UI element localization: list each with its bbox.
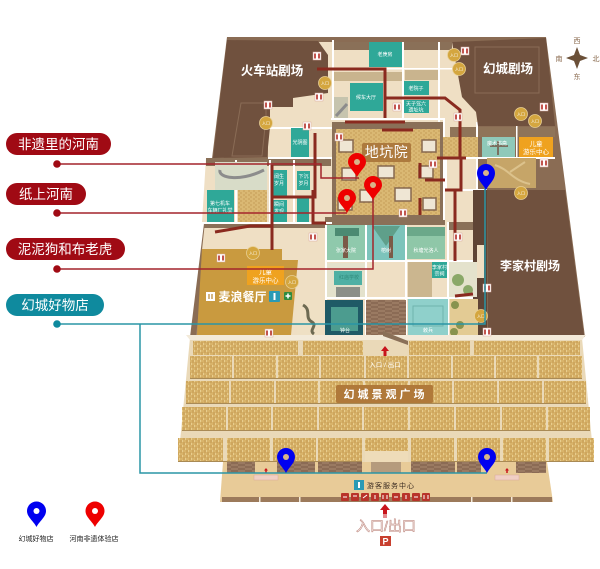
restaurant: 麦浪餐厅: 游乐中心 [252, 276, 279, 284]
callout: 纸上河南 [6, 183, 86, 217]
teal exhibition rooms: 发现 [274, 208, 284, 215]
callout: 泥泥狗和布老虎 [6, 238, 125, 273]
compass: 北 [592, 55, 600, 63]
callout: 幻城好物店: 幻城好物店 [21, 298, 89, 313]
entrance markers [246, 48, 542, 322]
garden and sand areas: 魔术书斋 [487, 140, 507, 147]
courtyard halls [325, 225, 448, 335]
theatre: 李家村剧场: 李家村剧场 [500, 258, 560, 273]
teal exhibition rooms: 天子驾六 [406, 100, 426, 108]
compass [556, 37, 600, 81]
service icons [341, 493, 430, 501]
teal exhibition rooms: 候车大厅 [356, 94, 376, 101]
compass: 东 [574, 72, 580, 81]
visitor service centre [220, 451, 553, 502]
teal exhibition rooms [207, 42, 447, 278]
theatre: 火车站剧场 [213, 40, 328, 158]
children's centre: 儿童游乐中心 [519, 137, 553, 157]
blue pin: south-west [277, 448, 295, 473]
legend: 幻城好物店 [18, 502, 54, 543]
theatre: 李家村剧场 [473, 190, 584, 335]
plaza: 幻城景观广场: 入口 / 出口 [369, 360, 401, 369]
teal exhibition rooms: 李家村 [432, 264, 447, 271]
callout: 非遗里的河南 [6, 133, 111, 168]
teal exhibition rooms: 老院子 [408, 85, 424, 92]
teal exhibition rooms: 光阴图 [292, 139, 308, 146]
teal exhibition rooms: 岁月 [274, 180, 284, 187]
callout: 纸上河南: 纸上河南 [19, 187, 73, 202]
teal exhibition rooms: 阔生 [274, 173, 284, 180]
entrance label: 入口/出口 [356, 518, 416, 534]
courtyard halls: 红庙学校 [339, 274, 359, 281]
legend: 幻城好物店: 幻城好物店 [18, 534, 54, 543]
theatre: 幻城剧场: 幻城剧场 [483, 61, 533, 76]
red pin 3 [338, 189, 356, 213]
visitor service centre: 游客服务中心 [367, 481, 415, 490]
children's centre: 儿童游乐中心: 儿童 [530, 139, 543, 148]
compass: 西 [574, 37, 580, 45]
leader lines [57, 164, 487, 473]
teal exhibition rooms: 下沉 [298, 173, 309, 180]
children's centre: 儿童游乐中心: 游乐中心 [523, 147, 550, 156]
label: 地坑院: 地坑院 [365, 144, 408, 160]
teal exhibition rooms: 岁月 [298, 180, 309, 187]
icon: parking [380, 536, 391, 546]
restaurant: 麦浪餐厅 [197, 249, 298, 335]
teal exhibition rooms: 遗址坑 [408, 106, 424, 114]
restrooms icons [217, 47, 548, 337]
entrance arrow [380, 504, 390, 517]
courtyard halls: 榕树 [381, 247, 391, 254]
theatre: 幻城剧场 [452, 38, 555, 126]
callout: 泥泥狗和布老虎: 泥泥狗和布老虎 [18, 242, 112, 257]
legend: 河南非遗体验店: 河南非遗体验店 [70, 534, 118, 543]
callout: 幻城好物店 [6, 294, 104, 328]
blue pin: north [477, 164, 495, 190]
courtyard halls: 敕兵 [423, 327, 433, 334]
courtyard: 地坑院 [332, 122, 443, 217]
teal exhibition rooms: 车辆厂礼堂 [207, 207, 233, 214]
courtyard halls: 张家大院 [336, 247, 356, 254]
teal exhibition rooms: 老庚房 [377, 51, 393, 58]
icon: parking: P [382, 536, 389, 546]
courtyard halls: 秋塘光洛人 [413, 247, 439, 254]
theatre: 火车站剧场: 火车站剧场 [241, 63, 303, 78]
courtyard halls: 钟台 [340, 327, 350, 334]
legend: 河南非遗体验店 [70, 502, 118, 543]
label: plaza name [336, 385, 433, 403]
callout: 非遗里的河南: 非遗里的河南 [18, 137, 99, 152]
teal exhibition rooms: 瞬间 [274, 201, 284, 208]
blue pin: south-east [478, 448, 496, 473]
plaza: 幻城景观广场 [178, 331, 594, 462]
small sign labels [254, 475, 519, 480]
building base [190, 37, 585, 337]
room dividers [204, 40, 518, 335]
restaurant: 麦浪餐厅: 儿童 [259, 267, 272, 276]
red walkways [215, 69, 473, 296]
red pin 2 [364, 176, 382, 200]
label: plaza name: 幻城景观广场 [344, 387, 428, 401]
garden and sand areas [215, 137, 536, 336]
restaurant: 麦浪餐厅: 麦浪餐厅 [218, 289, 267, 304]
teal exhibition rooms: 第七机车 [210, 200, 230, 207]
teal exhibition rooms: 宗祠 [434, 270, 445, 278]
red pin 1 [348, 153, 366, 177]
compass: 南 [556, 54, 562, 63]
